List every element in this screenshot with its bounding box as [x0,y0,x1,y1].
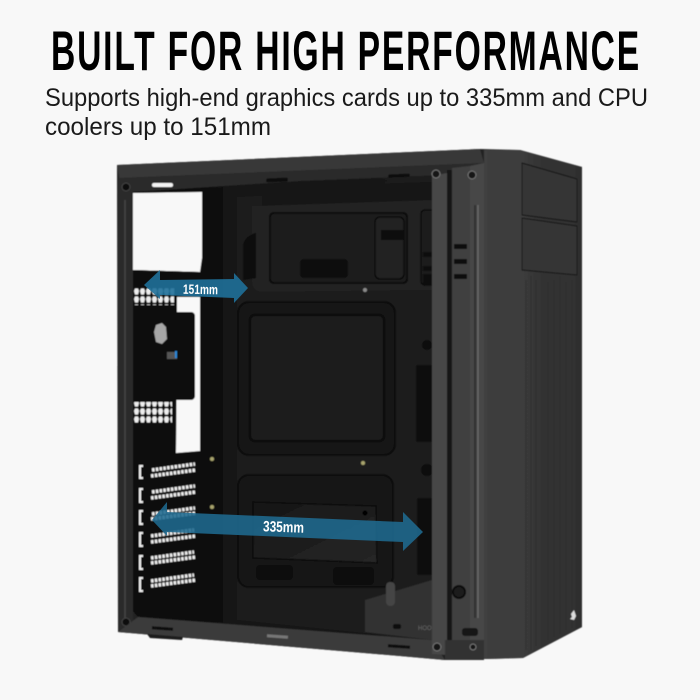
PC case [117,149,582,660]
bottom rail [118,617,445,660]
white strip [176,297,200,453]
honeycomb vents [134,288,174,424]
arrow: graphics card clearance 335mm [152,502,423,551]
front frame [423,163,484,660]
arrow: CPU cooler clearance 151mm [144,270,248,303]
CPU cutout [210,302,395,509]
top rail [117,149,484,192]
subtitle text: coolers up to 151mm [45,113,271,141]
upper recess [243,200,435,292]
PSU shroud: HOO [418,626,432,632]
arrow: graphics card clearance 335mm: 335mm [263,518,304,537]
expansion slots [140,464,196,591]
side panel [484,150,582,659]
white rear window [133,192,202,272]
lower recess [238,475,393,587]
case silhouette [117,149,582,660]
right cutouts [416,340,433,575]
rear left pillar [118,178,133,632]
arrow: CPU cooler clearance 151mm: 151mm [183,282,218,297]
rear fan panel [133,270,200,615]
interior back panel [132,176,432,640]
subtitle text: Supports high-end graphics cards up to 335mm and CPU [45,84,648,112]
PSU shroud [365,580,432,640]
